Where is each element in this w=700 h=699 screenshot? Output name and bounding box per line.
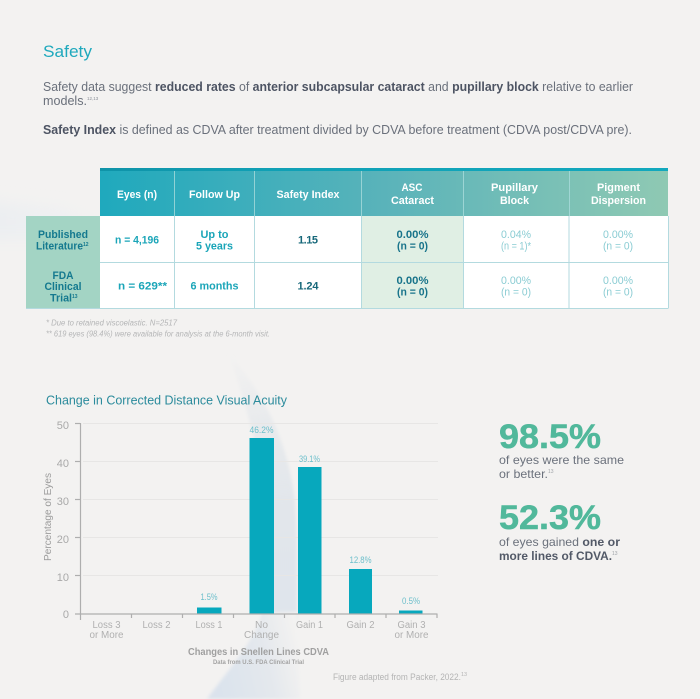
table header: Dispersion: [591, 195, 646, 207]
x axis labels: No: [255, 620, 268, 631]
safety table: [26, 168, 668, 308]
safety index values: 1.24: [298, 280, 319, 292]
stat: 98.5%: 98.5%: [499, 418, 601, 456]
pupillary block and pigment dispersion values: (n = 0): [501, 286, 531, 298]
value labels: 0.5%: [402, 596, 420, 607]
stat: 52.3%: [499, 499, 620, 563]
table header: [100, 168, 668, 216]
table header: Cataract: [391, 195, 434, 207]
intro text block: models.: [43, 94, 87, 108]
eyes and follow up values: 6 months: [190, 280, 238, 292]
row labels: 12: [83, 242, 89, 248]
stat: 52.3%: more lines of CDVA.: [499, 549, 612, 563]
x axis labels: Gain 2: [346, 620, 375, 631]
value labels: [200, 425, 420, 607]
pupillary block and pigment dispersion values: 0.00%: [603, 275, 633, 287]
row labels: [26, 216, 100, 308]
pupillary block and pigment dispersion values: 0.00%: [603, 229, 633, 241]
eyes and follow up values: n = 629**: [118, 280, 168, 292]
y axis labels: 40: [57, 458, 69, 470]
x axis labels: Gain 1: [296, 620, 323, 631]
x axis labels: or More: [394, 630, 429, 641]
y axis title: Percentage of Eyes: [43, 473, 54, 561]
row labels: Trial: [50, 292, 72, 304]
chart title: Change in Corrected Distance Visual Acuity: [46, 394, 288, 408]
asc cataract values: (n = 0): [397, 286, 428, 298]
table footnotes: * Due to retained viscoelastic. N=2517: [46, 318, 178, 328]
table header: Safety Index: [276, 189, 340, 201]
x axis labels: [90, 620, 429, 641]
x axis labels: Loss 1: [196, 620, 223, 631]
row labels: FDA: [52, 270, 74, 282]
figure credit: 13: [461, 672, 467, 678]
eyes and follow up values: 5 years: [196, 240, 233, 252]
row labels: Published: [38, 229, 88, 241]
intro text block: Safety Index is defined as CDVA after treatment divided by CDVA before treatment (CDVA post/CDVA pre).: [43, 123, 632, 137]
y axis labels: 20: [57, 534, 69, 546]
title: Safety: [43, 42, 92, 61]
bars: [197, 438, 422, 614]
stat: 52.3%: 52.3%: [499, 499, 601, 537]
table header: Block: [500, 195, 530, 207]
y axis labels: 10: [57, 572, 69, 584]
asc cataract values: (n = 0): [397, 240, 428, 252]
asc cataract values: 0.00%: [396, 229, 429, 241]
pupillary block and pigment dispersion values: [501, 229, 633, 298]
safety index values: [298, 234, 319, 292]
y axis labels: 30: [57, 496, 69, 508]
table header: Eyes (n): [117, 189, 157, 201]
y axis labels: 0: [63, 609, 69, 621]
intro text block: 12,13: [87, 96, 99, 101]
axes: [75, 423, 438, 620]
table header: Follow Up: [189, 189, 240, 201]
data source note: Data from U.S. FDA Clinical Trial: [213, 660, 304, 666]
intro text block: Safety data suggest reduced rates of anterior subcapsular cataract and pupillary block relative to earlier: [43, 80, 633, 94]
eyes and follow up values: n = 4,196: [115, 234, 159, 246]
x axis labels: Loss 3: [92, 620, 121, 631]
figure credit: Figure adapted from Packer, 2022.: [333, 672, 461, 682]
pupillary block and pigment dispersion values: (n = 0): [603, 240, 633, 252]
pupillary block and pigment dispersion values: 0.00%: [501, 275, 531, 287]
value labels: 46.2%: [250, 425, 274, 436]
stat: 98.5%: or better.: [499, 467, 548, 481]
table header: Pigment: [597, 182, 640, 194]
x axis labels: or More: [90, 630, 124, 641]
bar chart: [43, 420, 438, 666]
row labels: 13: [72, 294, 78, 300]
table footnotes: ** 619 eyes (98.4%) were available for analysis at the 6-month visit.: [46, 330, 270, 338]
y axis labels: [57, 420, 69, 621]
table footnotes: [46, 318, 270, 338]
stat: 98.5%: [499, 418, 624, 481]
table header: ASC: [402, 182, 423, 194]
pupillary block and pigment dispersion values: (n = 1)*: [501, 240, 532, 252]
stat: 52.3%: of eyes gained one or: [499, 535, 620, 549]
pupillary block and pigment dispersion values: (n = 0): [603, 286, 633, 298]
table body cells: [26, 216, 668, 308]
background swooshes: [0, 200, 300, 699]
safety index values: 1.15: [298, 234, 318, 246]
table header: Pupillary: [491, 182, 539, 194]
stat: 52.3%: 13: [612, 551, 618, 557]
x axis labels: Gain 3: [398, 620, 426, 631]
row labels: Clinical: [44, 281, 82, 293]
asc cataract values: 0.00%: [396, 275, 429, 287]
row labels: Literature: [36, 240, 83, 252]
x axis labels: Loss 2: [142, 620, 171, 631]
y axis labels: 50: [57, 420, 69, 432]
value labels: 12.8%: [350, 555, 372, 566]
x axis title: Changes in Snellen Lines CDVA: [188, 647, 329, 658]
asc cataract values: [396, 229, 429, 298]
value labels: 39.1%: [299, 454, 320, 465]
stat: 98.5%: 13: [548, 469, 554, 475]
x axis labels: Change: [244, 630, 279, 641]
eyes and follow up values: [115, 229, 238, 292]
intro text block: [43, 80, 633, 137]
pupillary block and pigment dispersion values: 0.04%: [501, 229, 531, 241]
value labels: 1.5%: [200, 592, 218, 603]
eyes and follow up values: Up to: [200, 229, 229, 241]
stat: 98.5%: of eyes were the same: [499, 453, 624, 467]
